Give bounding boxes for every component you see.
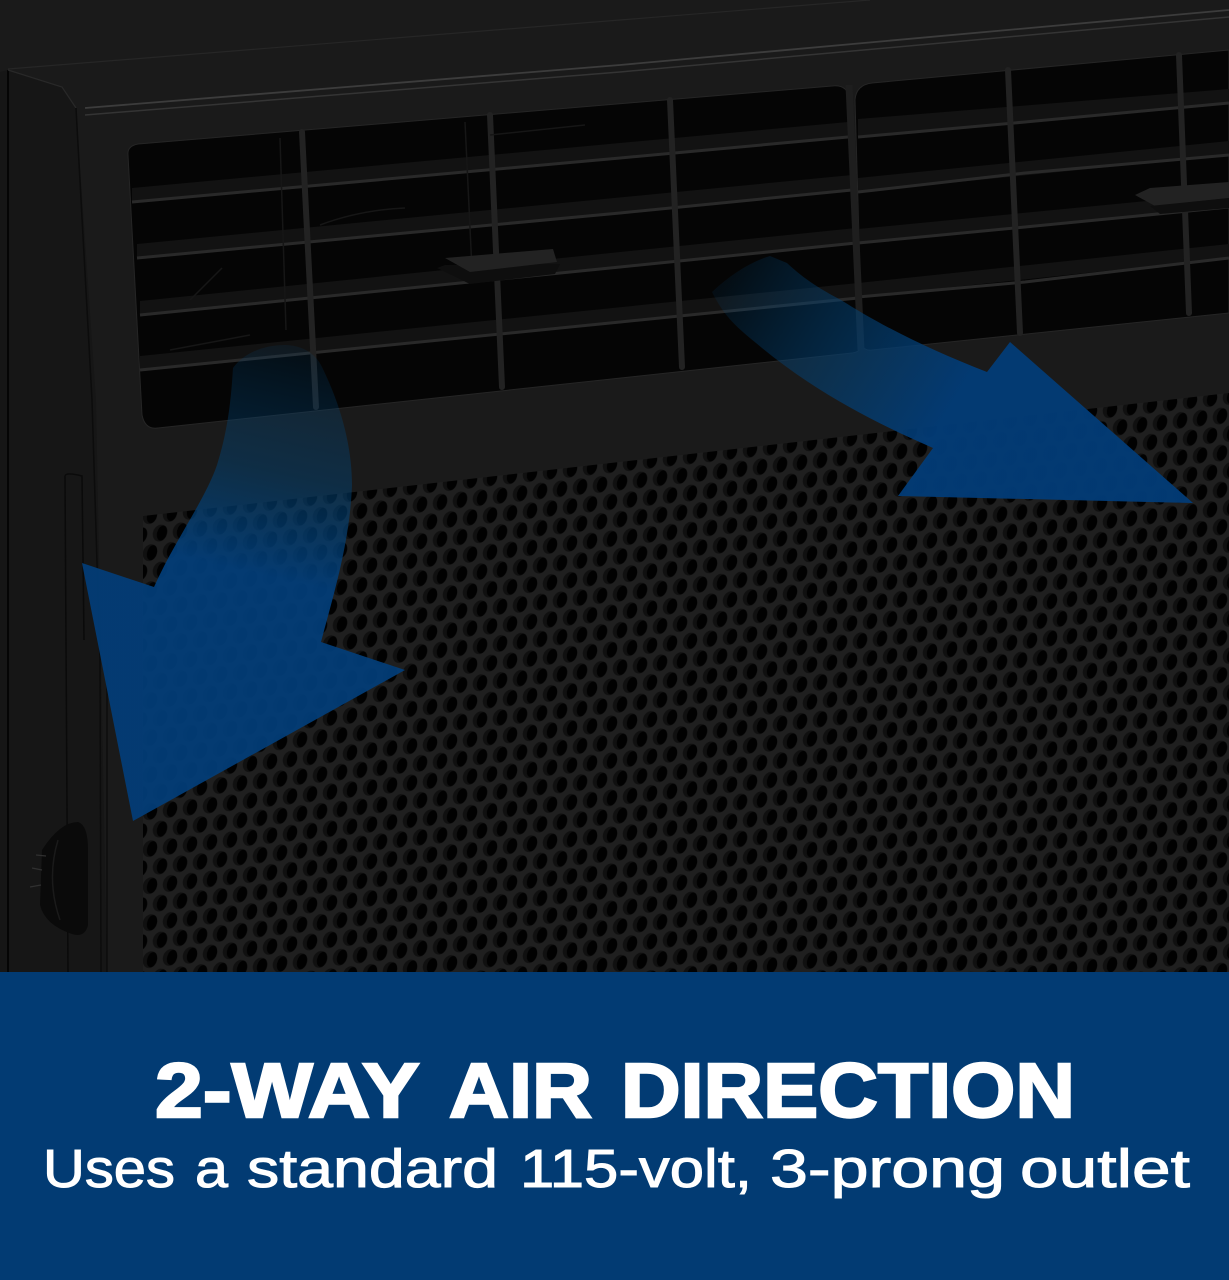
subheading: a [195,1139,229,1199]
heading: AIR [449,1048,592,1134]
control dial [30,822,88,935]
subheading: Uses [43,1139,175,1199]
subheading: outlet [1020,1139,1190,1199]
perforated grille panel [143,393,1229,972]
subheading: 115-volt, [520,1139,752,1199]
air conditioner photo [0,0,1229,972]
louver window right [855,50,1229,350]
vane knob right [1135,182,1229,214]
arrow: air flow down-right [712,256,1193,503]
heading: DIRECTION [621,1048,1075,1134]
vane knob center [437,249,560,284]
top cover lines [8,0,1229,115]
caption banner [0,972,1229,1280]
arrow: air flow down-left [82,345,405,821]
left side panel [0,70,107,972]
subheading: 3-prong [770,1139,1005,1199]
heading: 2-WAY [155,1048,419,1134]
subheading: standard [247,1139,498,1199]
louvers [132,55,1229,407]
louver window left [128,86,861,428]
